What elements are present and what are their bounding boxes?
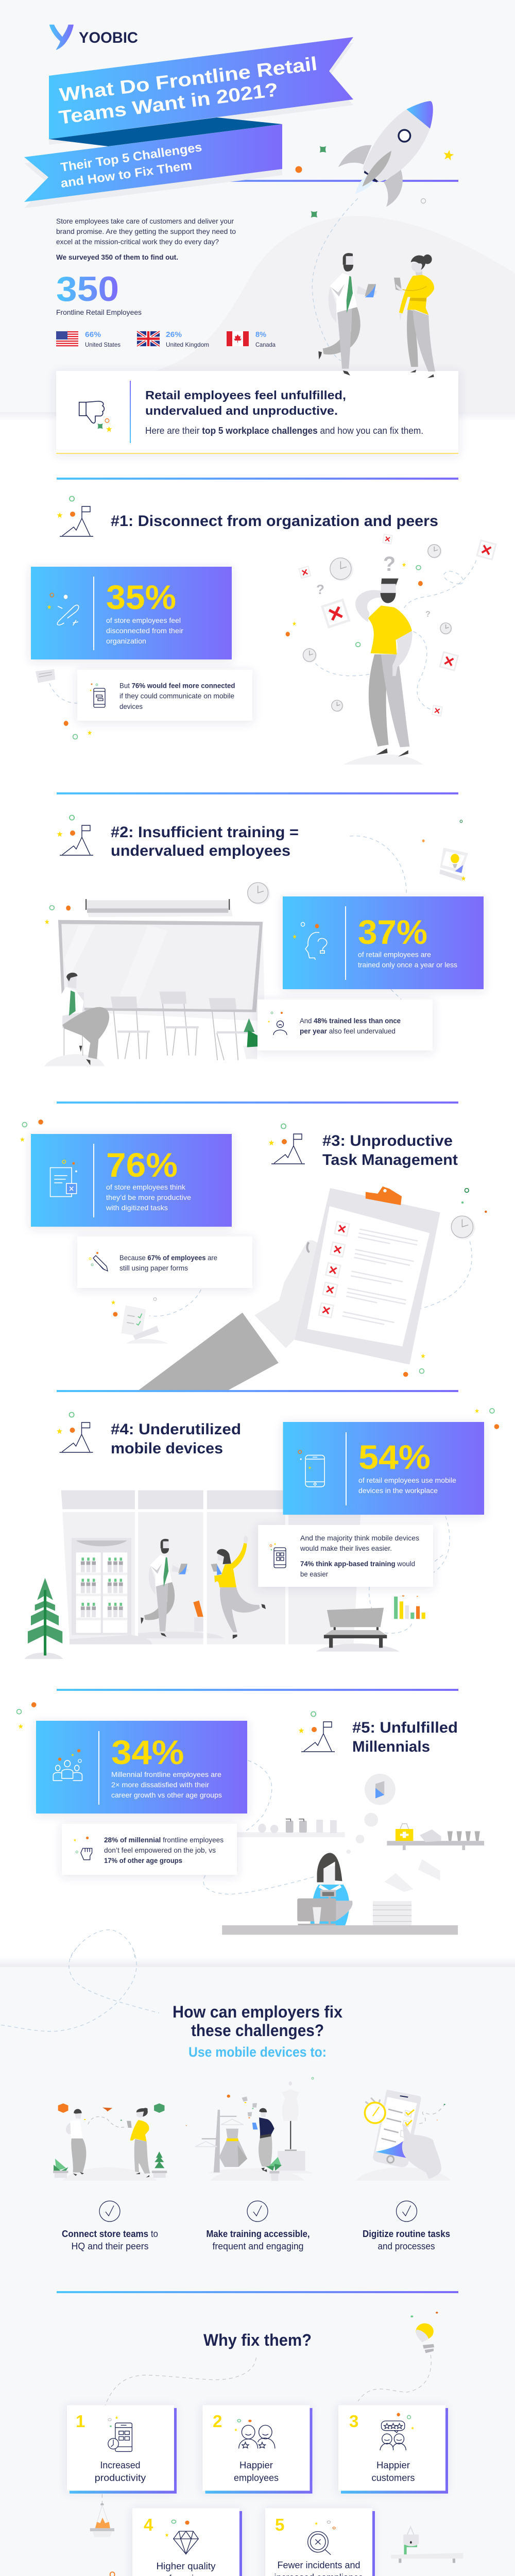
note card: app-based training: would make their lives easier.: [300, 1544, 392, 1552]
title banner: [49, 37, 353, 146]
dots near 34% card: [17, 1702, 36, 1728]
heading: #3 Unproductive: #3: Unproductive: [322, 1132, 453, 1149]
illustration: store front: [24, 1490, 443, 1659]
illustration: clipboard in hand: [111, 1187, 487, 1390]
heading: #3 Unproductive: Task Management: [322, 1151, 458, 1168]
dashed link right of note card: [434, 1516, 450, 1572]
dashed rocket trail: [312, 198, 358, 361]
stat card: 54%: 54%: [358, 1438, 431, 1476]
card 1: increased productivity: productivity: [95, 2473, 146, 2483]
heading: how can employers fix: these challenges?: [191, 2021, 324, 2040]
stat: 350 employees: Frontline Retail Employees: [56, 308, 142, 316]
note card: 76% connected: [77, 670, 252, 721]
flag row: United States: 66%: [85, 330, 101, 339]
flag row: Canada: 8%: [255, 330, 266, 339]
heading: #5 Unfulfilled Millennials: #5: Unfulfilled: [352, 1719, 458, 1736]
note card: 48%: [258, 999, 433, 1050]
card 5: fewer incidents: 5: [275, 2515, 284, 2534]
intro text: Store employees take care of customers and deliver your: [56, 217, 234, 225]
note card: 28%: don’t feel empowered on the job, vs: [104, 1846, 216, 1854]
icon: rocket: [338, 101, 433, 207]
question marks: ?: [383, 553, 396, 575]
question marks: ?: [425, 610, 431, 619]
step: connect teams: HQ and their peers: [71, 2241, 148, 2251]
main ribbon: [49, 37, 353, 139]
step: make training accessible: frequent and engaging: [212, 2241, 304, 2251]
question marks: [316, 553, 431, 619]
note card: 67%: Because 67% of employees are: [119, 1253, 217, 1262]
note card: app-based training: 74% think app-based training would: [300, 1560, 415, 1568]
flag row: United States: [56, 330, 121, 348]
card 1: increased productivity: 1: [76, 2412, 85, 2431]
icon: phone with tasks: [108, 2416, 132, 2451]
note card: 76% connected: devices: [119, 702, 143, 710]
heading: how can employers fix: [173, 2003, 342, 2060]
stat card: 34%: Millennial frontline employees are: [111, 1770, 221, 1778]
heading: #1 Disconnect: #1: Disconnect from organization and peers: [111, 513, 438, 530]
card 2: happier employees: [203, 2405, 312, 2494]
card 5: fewer incidents: [265, 2508, 375, 2576]
stat card: 54%: devices in the workplace: [358, 1486, 438, 1495]
icon: thumbs down: [79, 401, 112, 432]
stat card: 37%: trained only once a year or less: [358, 960, 457, 969]
card 4: higher quality: Higher quality: [157, 2561, 215, 2571]
stat card: 35%: disconnected from their: [106, 626, 183, 635]
summary text: Retail employees feel unfulfilled,: [145, 388, 346, 402]
note card: app-based training: [258, 1525, 433, 1587]
illustration: woman with phone: [394, 255, 435, 378]
stat card: 34%: [36, 1721, 247, 1814]
illustration: confused man with clocks: [286, 534, 497, 765]
heading: #2 Insufficient training: #2: Insufficient training =: [111, 824, 299, 841]
step: make training accessible: Make training accessible,: [206, 2229, 310, 2239]
decorative note and dots: [36, 669, 92, 739]
background: top section: [0, 0, 515, 412]
step: connect teams: [62, 2201, 158, 2251]
heading: What Do Frontline Retail: [58, 53, 318, 106]
card 5: fewer incidents: Fewer incidents and: [277, 2560, 360, 2570]
icon: mountain flag: [57, 496, 93, 536]
icon: check circle: [247, 2201, 268, 2222]
stat card: 34%: 34%: [111, 1733, 184, 1771]
step: connect teams: Connect store teams to: [62, 2229, 158, 2239]
dots near 76% card: [20, 1120, 43, 1142]
divider: [57, 792, 458, 794]
card 1: increased productivity: Increased: [100, 2460, 140, 2470]
flag row: Canada: Canada: [255, 341, 276, 348]
card 4: higher quality: [132, 2508, 242, 2576]
stat card: 34%: career growth vs other age groups: [111, 1791, 222, 1799]
heading: #2 Insufficient training: [57, 815, 299, 859]
note card: 28%: 17% of other age groups: [104, 1856, 182, 1865]
step: digitize routine tasks: Digitize routine tasks: [363, 2229, 450, 2239]
flag row: United Kingdom: 26%: [166, 330, 182, 339]
stat card: 35%: 35%: [106, 578, 176, 616]
flag row: United Kingdom: United Kingdom: [166, 341, 209, 348]
heading: #2 Insufficient training: undervalued employees: [111, 842, 290, 859]
stat card: 54%: [283, 1422, 484, 1515]
illustration: connect store teams: [53, 2104, 167, 2181]
icon: mountain flag: [269, 1124, 305, 1164]
divider: [57, 2291, 458, 2293]
card 3: happier customers: 3: [349, 2412, 358, 2431]
illustration: cashier at counter: [71, 1760, 484, 1958]
divider: [57, 1101, 458, 1104]
icon: mountain flag: [57, 1412, 93, 1452]
flag row: Canada: [227, 330, 276, 348]
ribbon fold: [49, 117, 282, 146]
summary text: [145, 388, 423, 436]
icon: mountain flag: [57, 815, 93, 855]
dots near 54% card: [475, 1409, 499, 1429]
intro text: brand promise. Are they getting the support they need to: [56, 227, 236, 235]
illustration: phone and hand: [356, 2090, 451, 2181]
note card: app-based training: be easier: [300, 1570, 328, 1578]
stat card: 35%: organization: [106, 637, 146, 645]
flag row: United Kingdom: [137, 330, 209, 348]
note card: app-based training: And the majority think mobile devices: [300, 1534, 419, 1542]
note card: 76% connected: if they could communicate on mobile: [119, 691, 234, 700]
note card: 76% connected: But 76% would feel more connected: [119, 681, 235, 689]
icon: sad person: [268, 1012, 287, 1035]
stat card: 76%: with digitized tasks: [106, 1204, 168, 1212]
heading: #3 Unproductive: [269, 1124, 458, 1168]
stat card: 76%: [31, 1134, 232, 1227]
logo: top: [49, 25, 138, 50]
icon: magnifier with x: [308, 2521, 335, 2555]
icon: broken link: [47, 593, 79, 625]
banner shadow: [49, 43, 353, 145]
note card: 67%: [77, 1236, 252, 1288]
icon: phone chat: [90, 683, 105, 707]
heading: how can employers fix: How can employers fix: [173, 2003, 342, 2021]
card 3: happier customers: [338, 2405, 448, 2494]
note card: 48%: per year also feel undervalued: [300, 1027, 396, 1035]
icon: head with question: [293, 922, 327, 960]
step: digitize routine tasks: [363, 2201, 450, 2251]
icon: raised fist: [74, 1837, 92, 1860]
divider: [57, 1390, 458, 1392]
subtitle text: and How to Fix Them: [60, 158, 193, 191]
summary text: Here are their top 5 workplace challenges and how you can fix them.: [145, 426, 423, 436]
stat card: 35%: [31, 567, 232, 659]
decorative sparkles around rocket: [296, 146, 455, 217]
note card: 28%: 28% of millennial frontline employees: [104, 1836, 224, 1844]
card 2: happier employees: 2: [213, 2412, 222, 2431]
intro text: excel at the mission-critical work they do every day?: [56, 238, 219, 246]
stat: 350 employees: [56, 269, 142, 316]
illustration: man with phone: [318, 253, 377, 376]
heading: #4 Underutilized: #4: Underutilized: [111, 1421, 241, 1438]
heading: #4 Underutilized: mobile devices: [111, 1440, 223, 1457]
icon: customers with rating: [380, 2413, 414, 2450]
summary text: undervalued and unproductive.: [145, 404, 338, 417]
card 1: increased productivity: [67, 2405, 177, 2494]
heading: #5 Unfulfilled Millennials: Millennials: [352, 1738, 430, 1755]
heading: Teams Want in 2021?: [58, 79, 279, 128]
heading: how can employers fix: Use mobile devices to:: [188, 2044, 327, 2060]
icon: document: [50, 1160, 77, 1197]
stat card: 37%: 37%: [358, 913, 427, 951]
stat: 350 employees: 350: [56, 269, 119, 309]
card 3: happier customers: customers: [372, 2473, 415, 2483]
card 2: happier employees: Happier: [239, 2460, 273, 2470]
note card: 48%: And 48% trained less than once: [300, 1016, 401, 1025]
icon: phone: [298, 1450, 324, 1487]
icon: mountain flag: [299, 1711, 335, 1752]
man walking with phone: [141, 1539, 188, 1637]
stat card: 76%: of store employees think: [106, 1183, 186, 1191]
subtitle text: Their Top 5 Challenges: [60, 140, 203, 175]
card 4: higher quality: 4: [144, 2515, 153, 2534]
note card: 67%: still using paper forms: [119, 1264, 188, 1272]
divider: [57, 478, 458, 480]
intro text: We surveyed 350 of them to find out.: [56, 253, 178, 261]
icon: check circle: [397, 2201, 417, 2222]
icon: diamond: [165, 2520, 198, 2554]
heading: [58, 53, 318, 128]
step: make training accessible: [206, 2201, 310, 2251]
illustration: training rack and mannequin: [186, 2077, 314, 2181]
subtitle text: [60, 140, 203, 191]
card 3: happier customers: Happier: [376, 2460, 410, 2470]
background hill: [154, 216, 515, 412]
subtitle banner: [24, 124, 282, 208]
stat card: 34%: 2× more dissatisfied with their: [111, 1781, 209, 1789]
panel: intro summary: [56, 371, 458, 454]
illustration: training room: [44, 820, 468, 1066]
stat card: 54%: of retail employees use mobile: [358, 1476, 456, 1484]
intro text: [56, 217, 236, 261]
stat card: 76%: 76%: [106, 1146, 178, 1184]
divider behind rocket: [196, 180, 458, 182]
heading: why fix them: Why fix them?: [203, 2331, 312, 2349]
icon: pencil: [89, 1252, 108, 1271]
heading: #1 Disconnect: [57, 496, 438, 536]
icon: group of people: [53, 1749, 82, 1781]
dashed curves entering section: [0, 1947, 159, 2031]
stat card: 35%: of store employees feel: [106, 616, 181, 624]
icon: check circle: [99, 2201, 120, 2222]
logo: top: YOOBIC: [79, 29, 138, 46]
heading: #4 Underutilized: [57, 1412, 241, 1457]
decor: bulb, dashes, plant and shelf: [90, 2312, 463, 2576]
flag row: United States: United States: [85, 341, 121, 348]
stat card: 76%: they’d be more productive: [106, 1193, 191, 1201]
card 2: happier employees: employees: [234, 2473, 279, 2483]
note card: 28%: [62, 1824, 237, 1875]
icon: phone with app grid: [270, 1544, 286, 1568]
icon: happy employees: [234, 2419, 275, 2449]
step: digitize routine tasks: and processes: [378, 2241, 435, 2251]
question marks: ?: [316, 582, 324, 597]
stat card: 37%: [283, 896, 484, 989]
background: solutions section: [0, 1967, 515, 2576]
stat card: 37%: of retail employees are: [358, 950, 431, 958]
heading: #5 Unfulfilled Millennials: [299, 1711, 458, 1755]
divider: [57, 1689, 458, 1691]
